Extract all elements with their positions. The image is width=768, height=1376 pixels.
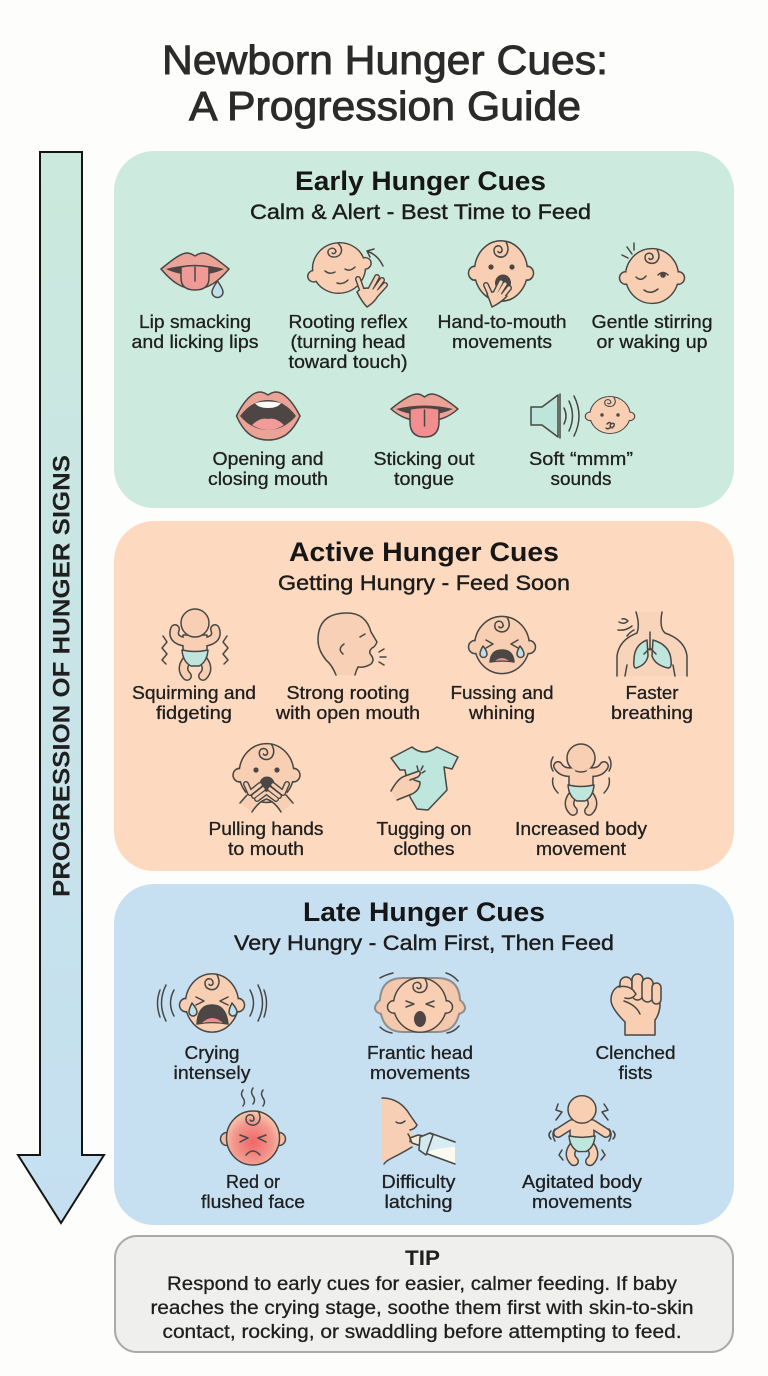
icon: torso with lungs — [617, 612, 687, 676]
title: A Progression Guide — [189, 83, 581, 129]
heading: active hunger cues — [278, 537, 570, 595]
label — [201, 1171, 305, 1212]
label: toward touch) — [288, 351, 408, 372]
label — [450, 682, 554, 723]
label — [288, 311, 408, 372]
icon: baby with hand at mouth — [468, 241, 534, 307]
label: Sticking out — [374, 448, 474, 469]
icon: agitated baby — [549, 1096, 615, 1161]
label: Increased body — [515, 818, 648, 839]
label: closing mouth — [208, 468, 328, 489]
title — [162, 37, 608, 129]
label: Tugging on — [376, 818, 472, 839]
label: movement — [536, 838, 626, 859]
label: Soft “mmm” — [529, 448, 633, 469]
label: Frantic head — [367, 1042, 473, 1063]
label: Difficulty — [382, 1171, 456, 1192]
panel: active hunger cues — [114, 521, 734, 871]
icon: clenched fist — [611, 974, 661, 1035]
cue: tugging on clothes — [376, 747, 472, 859]
cue: opening and closing mouth — [208, 392, 328, 489]
label: Hand-to-mouth — [438, 311, 566, 332]
label: fidgeting — [156, 702, 232, 723]
label — [515, 818, 648, 859]
label: Faster — [626, 682, 678, 703]
label: whining — [468, 702, 535, 723]
heading: late hunger cues — [234, 897, 614, 955]
icon: crying baby with sound waves — [158, 974, 266, 1032]
cue: gentle stirring — [592, 243, 712, 352]
tip text — [150, 1273, 694, 1343]
panel: early hunger cues — [114, 151, 734, 508]
label: clothes — [394, 838, 454, 859]
cue: sticking out tongue — [374, 394, 474, 489]
heading: early hunger cues — [250, 166, 591, 224]
icon: baby profile with open mouth — [318, 613, 386, 675]
label — [592, 311, 712, 352]
tip heading: TIP — [405, 1247, 440, 1270]
label: Agitated body — [522, 1171, 643, 1192]
label — [611, 682, 693, 723]
cue: clenched fists — [596, 974, 676, 1083]
label — [529, 448, 633, 489]
cue: increased body movement — [515, 744, 648, 859]
cue: frantic head movements — [367, 973, 473, 1083]
label — [438, 311, 566, 352]
label — [596, 1042, 676, 1083]
heading: late hunger cues: Late Hunger Cues — [303, 897, 545, 927]
icon: open mouth — [236, 392, 300, 440]
label: Fussing and — [450, 682, 554, 703]
panel: tip — [115, 1236, 733, 1352]
label: sounds — [550, 468, 612, 489]
label: movements — [532, 1191, 632, 1212]
label — [367, 1042, 473, 1083]
label: tongue — [394, 468, 454, 489]
heading: early hunger cues: Early Hunger Cues — [295, 166, 546, 196]
icon: baby with both hands at mouth — [233, 744, 300, 812]
label — [275, 682, 420, 723]
cue: squirming — [132, 609, 256, 723]
label: movements — [370, 1062, 470, 1083]
arrow: progression of hunger signs — [18, 152, 104, 1223]
label: Rooting reflex — [288, 311, 408, 332]
icon: baby profile with bottle — [382, 1098, 455, 1164]
label — [382, 1171, 456, 1212]
label: Red or — [226, 1171, 280, 1192]
icon: lips with tongue and droplet — [161, 253, 229, 298]
heading: late hunger cues: Very Hungry - Calm First, Then Feed — [234, 931, 614, 955]
heading: early hunger cues: Calm & Alert - Best Time to Feed — [250, 200, 591, 224]
cue: red or flushed face — [201, 1088, 305, 1212]
title: Newborn Hunger Cues: — [162, 37, 608, 83]
tip text: contact, rocking, or swaddling before attempting to feed. — [162, 1321, 682, 1343]
label: movements — [452, 331, 552, 352]
cue: hand-to-mouth — [438, 241, 566, 352]
label: Pulling hands — [208, 818, 324, 839]
label — [174, 1042, 251, 1083]
cue: faster breathing — [611, 612, 693, 723]
label: (turning head — [290, 331, 406, 352]
tip text: reaches the crying stage, soothe them first with skin-to-skin — [150, 1297, 694, 1319]
label: and licking lips — [132, 331, 258, 352]
label — [522, 1171, 643, 1212]
cue: pulling hands to mouth — [208, 744, 324, 859]
icon: baby with motion lines — [551, 744, 611, 811]
cue: fussing — [450, 616, 554, 723]
label: breathing — [611, 702, 693, 723]
label: Squirming and — [132, 682, 256, 703]
cue: rooting reflex — [288, 236, 408, 372]
icon: red face with steam — [220, 1088, 286, 1165]
label — [208, 818, 324, 859]
label: Strong rooting — [286, 682, 410, 703]
label — [132, 682, 256, 723]
cue: soft mmm sounds — [529, 394, 635, 489]
label — [374, 448, 474, 489]
label: or waking up — [596, 331, 708, 352]
cue: agitated body movements — [522, 1096, 643, 1212]
label — [132, 311, 258, 352]
icon: head shaking side to side — [375, 973, 465, 1033]
cue: crying intensely — [158, 974, 266, 1083]
heading: active hunger cues: Getting Hungry - Feed Soon — [278, 571, 570, 595]
label: flushed face — [201, 1191, 305, 1212]
label: latching — [384, 1191, 452, 1212]
icon: squirming baby — [162, 609, 228, 676]
icon: fussing baby — [469, 616, 535, 674]
panel: late hunger cues — [114, 884, 734, 1225]
icon: onesie with tugging hand — [391, 747, 458, 810]
arrow: progression of hunger signs: PROGRESSION OF HUNGER SIGNS — [48, 455, 76, 897]
label: fists — [618, 1062, 652, 1083]
cue: lip smacking — [132, 253, 258, 352]
label: Lip smacking — [139, 311, 251, 332]
label — [208, 448, 328, 489]
label: to mouth — [228, 838, 304, 859]
icon: baby waking with one eye open — [620, 243, 684, 303]
cue: difficulty latching — [382, 1098, 456, 1212]
label: Gentle stirring — [592, 311, 712, 332]
label — [376, 818, 472, 859]
tip text: Respond to early cues for easier, calmer feeding. If baby — [167, 1273, 677, 1295]
label: Crying — [184, 1042, 240, 1063]
cue: strong rooting — [275, 613, 420, 723]
icon: baby head turning toward hand — [301, 236, 385, 307]
label: Opening and — [212, 448, 324, 469]
icon: speaker and baby — [531, 394, 635, 438]
heading: active hunger cues: Active Hunger Cues — [289, 537, 559, 567]
label: intensely — [174, 1062, 251, 1083]
label: with open mouth — [275, 702, 420, 723]
label: Clenched — [596, 1042, 676, 1063]
icon: tongue out — [391, 394, 458, 437]
